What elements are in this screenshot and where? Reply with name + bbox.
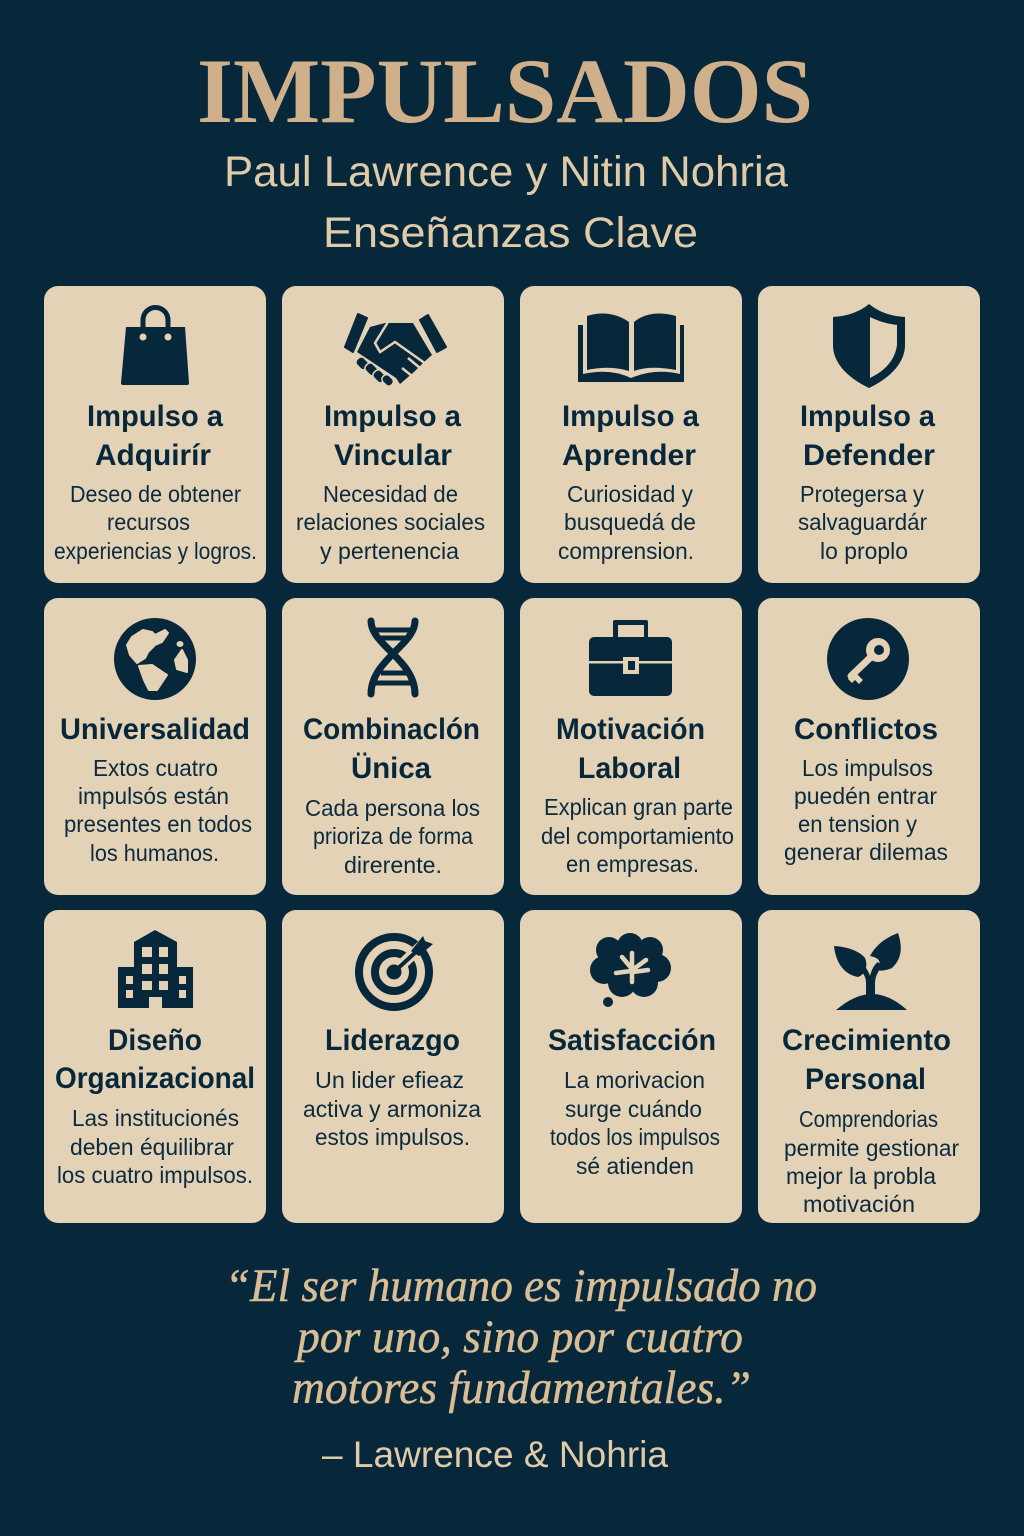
description: Un lider efieaz (315, 1067, 464, 1093)
description: Explican gran parte (544, 794, 733, 820)
description: permite gestionar (784, 1135, 959, 1161)
description: en empresas. (566, 851, 699, 877)
description: experiencias y logros. (54, 538, 257, 564)
description: Los impulsos (802, 755, 933, 781)
panel: Impulso a Defender (758, 286, 980, 583)
heading: Motivación (556, 713, 705, 746)
panel: Impulso a Adquirir (44, 286, 266, 583)
description: Comprendorias (799, 1106, 938, 1132)
panel: Conflictos (758, 598, 980, 895)
description: del comportamiento (541, 823, 734, 849)
panel: Satisfaccion (520, 910, 742, 1223)
heading: Defender (803, 439, 935, 472)
description: deben équilibrar (70, 1134, 234, 1160)
description: generar dilemas (784, 839, 948, 865)
heading: Impulso a (324, 400, 461, 433)
subtitle: authors: Paul Lawrence y Nitin Nohria (224, 148, 788, 196)
icon: office building (118, 930, 193, 1008)
heading (87, 400, 223, 472)
heading: Crecimiento (782, 1024, 951, 1057)
description: salvaguardár (798, 509, 927, 535)
subtitle: key lessons: Enseñanzas Clave (323, 209, 698, 257)
heading: Laboral (578, 752, 681, 785)
description (57, 1105, 253, 1188)
description (296, 481, 485, 564)
description (784, 1106, 959, 1217)
description: La morivacion (564, 1067, 705, 1093)
quote (225, 1260, 817, 1414)
description: todos los impulsos (550, 1124, 720, 1150)
description: mejor la probla (786, 1163, 937, 1189)
description: motivación (803, 1191, 915, 1217)
description (541, 794, 734, 877)
description: Deseo de obtener (70, 481, 241, 507)
heading: Ünica (351, 752, 431, 785)
panel: Diseno Organizacional (44, 910, 266, 1223)
quote: “El ser humano es impulsado no (225, 1260, 817, 1312)
icon: shopping bag (121, 307, 189, 385)
description (550, 1067, 720, 1179)
description: estos impulsos. (315, 1124, 470, 1150)
description: los cuatro impulsos. (57, 1162, 253, 1188)
icon: briefcase (589, 620, 672, 696)
description: comprension. (558, 538, 694, 564)
panel: Impulso a Aprender (520, 286, 742, 583)
panel: Combinacion Unica (282, 598, 504, 895)
heading: Personal (805, 1063, 926, 1096)
icon: open book (578, 314, 684, 382)
heading: Vincular (334, 439, 452, 472)
panel: Crecimiento Personal (758, 910, 980, 1223)
description: sé atienden (576, 1153, 694, 1179)
description (784, 755, 948, 865)
description (798, 481, 927, 564)
heading (556, 713, 705, 785)
heading: Impulso a (562, 400, 699, 433)
heading: Combinaclón (303, 713, 480, 746)
icon: globe (114, 618, 196, 700)
heading: Aprender (562, 439, 696, 472)
heading: Conflictos (794, 713, 938, 746)
description: los humanos. (90, 840, 219, 866)
icon: DNA helix (371, 621, 415, 694)
heading: Impulso a (87, 400, 223, 433)
description: recursos (107, 509, 190, 535)
heading: Organizacional (55, 1062, 255, 1095)
panel: Motivacion Laboral (520, 598, 742, 895)
description: surge cuándo (565, 1096, 702, 1122)
description (558, 481, 696, 564)
description: Cada persona los (305, 795, 480, 821)
description: Curiosidad y (567, 481, 693, 507)
quote: motores fundamentales.” (292, 1362, 751, 1414)
panel: Liderazgo (282, 910, 504, 1223)
quote: por uno, sino por cuatro (294, 1311, 743, 1363)
icon: target with arrow (359, 936, 433, 1007)
heading (800, 400, 935, 472)
description: prioriza de forma (313, 823, 474, 849)
heading (303, 713, 480, 785)
icon: thought cloud with plant (590, 933, 671, 1007)
panel: Universalidad (44, 598, 266, 895)
heading: Impulso a (800, 400, 935, 433)
description: en tension y (798, 811, 917, 837)
description: direrente. (344, 852, 442, 878)
heading (324, 400, 461, 472)
icon: sprout (834, 933, 907, 1010)
description: presentes en todos (64, 811, 252, 837)
description: lo proplo (820, 538, 908, 564)
description: activa y armoniza (303, 1096, 482, 1122)
icon: key (827, 618, 909, 700)
description (303, 1067, 482, 1150)
heading: Universalidad (60, 713, 250, 746)
description: relaciones sociales (296, 509, 485, 535)
heading: Liderazgo (325, 1024, 460, 1057)
icon: handshake (345, 314, 446, 388)
description (64, 755, 252, 866)
description (54, 481, 257, 564)
description: busquedá de (564, 509, 696, 535)
heading (782, 1024, 951, 1096)
panel: Impulso a Vincular (282, 286, 504, 583)
description: puedén entrar (794, 783, 937, 809)
heading (562, 400, 699, 472)
heading (55, 1024, 255, 1095)
icon: shield (833, 304, 905, 388)
description: impulsós están (78, 783, 229, 809)
description: Protegersa y (800, 481, 924, 507)
heading: Diseño (108, 1024, 202, 1057)
description: y pertenencia (320, 538, 460, 564)
heading: Adquirír (95, 439, 211, 472)
description (305, 795, 480, 878)
description: Necesidad de (323, 481, 458, 507)
title: IMPULSADOS (197, 40, 813, 142)
heading: Satisfacción (548, 1024, 716, 1057)
description: Las institucionés (72, 1105, 239, 1131)
description: Extos cuatro (93, 755, 218, 781)
quote attribution: – Lawrence & Nohria (322, 1434, 668, 1475)
